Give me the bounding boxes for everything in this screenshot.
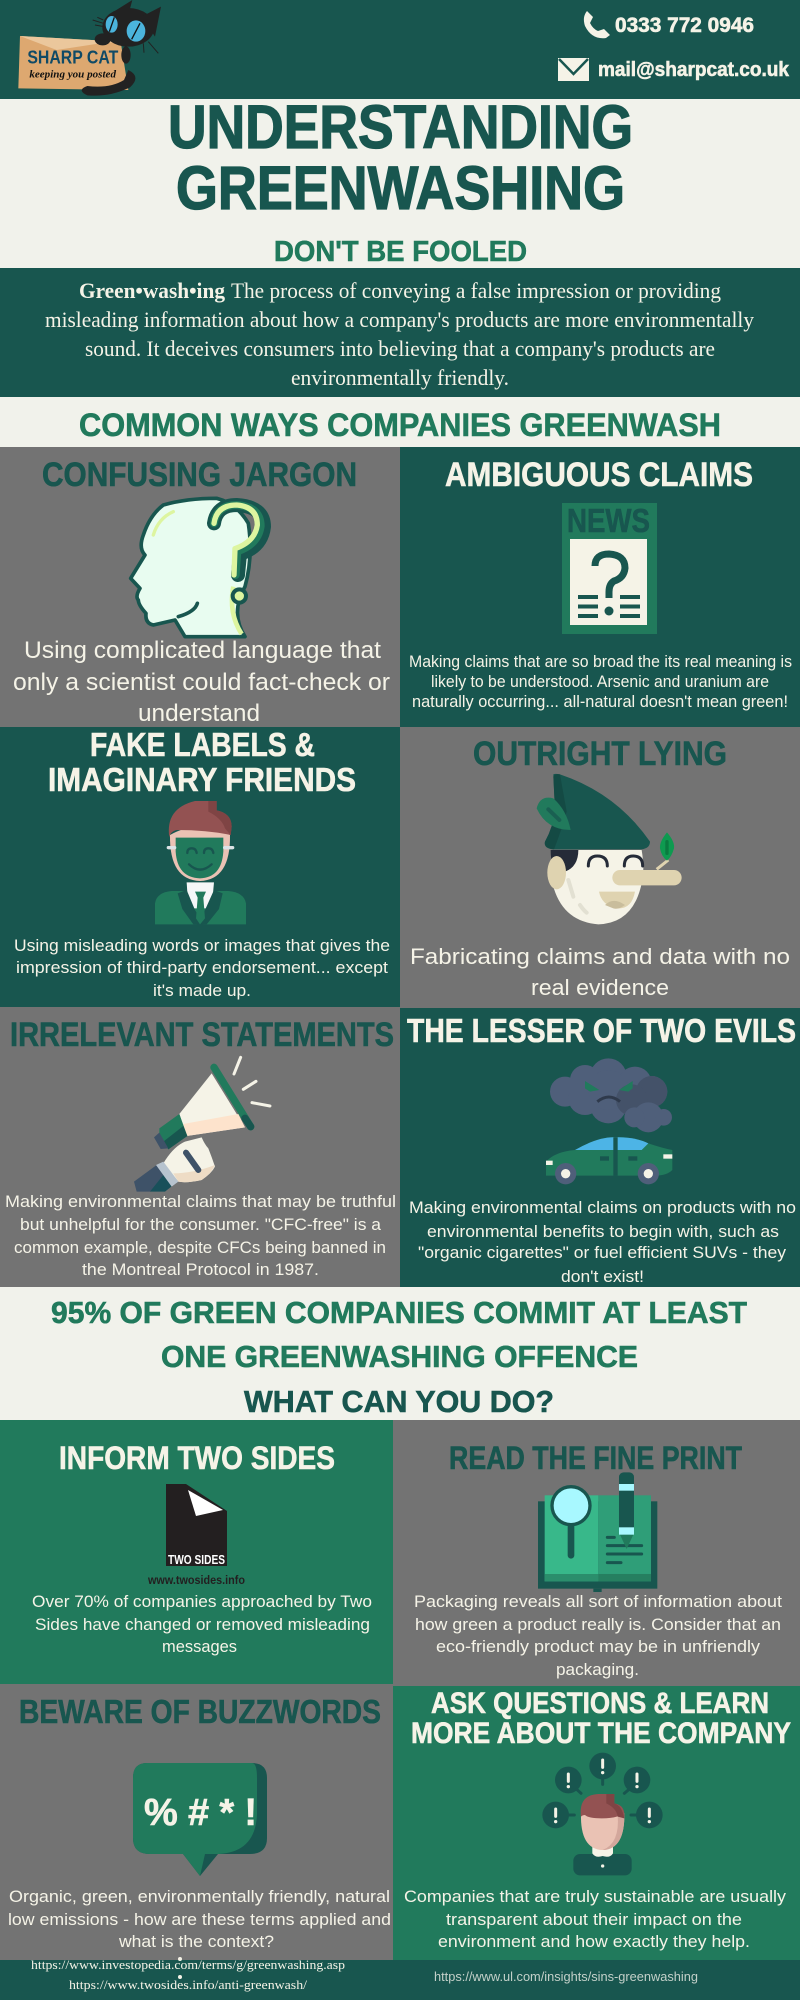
body text: the Montreal Protocol in 1987.	[82, 1260, 319, 1279]
body text	[409, 653, 792, 711]
body text: real evidence	[531, 975, 669, 1000]
panel: inform two sides	[0, 1420, 393, 1684]
subtitle: DON'T BE FOOLED	[274, 236, 527, 268]
icon: person with mask	[155, 801, 246, 924]
body text: what is the context?	[118, 1932, 274, 1951]
panel: lesser of two evils	[400, 1008, 800, 1287]
icon: person with question bubbles	[542, 1753, 663, 1875]
icon: Two Sides logo: TWO SIDES	[168, 1552, 225, 1567]
heading: FAKE LABELS &	[90, 726, 315, 763]
footer sources	[0, 1957, 800, 2000]
body text: eco-friendly product may be in unfriendly	[436, 1637, 761, 1656]
icon: Two Sides logo	[147, 1484, 245, 1587]
icon: Two Sides logo: www.twosides.info	[147, 1573, 245, 1587]
panel: ask questions	[393, 1686, 800, 1960]
title	[168, 93, 633, 222]
body text: understand	[138, 700, 260, 727]
body text: environmental benefits to begin with, such as	[427, 1222, 779, 1241]
body text: Making claims that are so broad the its real meaning is	[409, 653, 792, 671]
panel: outright lying	[400, 727, 800, 1008]
source link: investopedia: https://www.investopedia.com/terms/g/greenwashing.asp	[31, 1957, 345, 1972]
body text	[5, 1192, 396, 1279]
body text	[13, 637, 390, 727]
icon: head with question mark	[131, 498, 264, 637]
icon: pinocchio	[537, 774, 682, 924]
body text: how green a product really is. Consider that an	[415, 1615, 781, 1634]
body text	[404, 1887, 787, 1951]
body text: Packaging reveals all sort of information about	[414, 1592, 782, 1611]
icon: Sharp Cat logo: keeping you posted	[29, 69, 117, 80]
heading	[48, 726, 356, 798]
panel: beware of buzzwords	[0, 1684, 393, 1960]
panel: read the fine print	[393, 1420, 800, 1686]
definition panel: The process of conveying a false impression or providing	[231, 278, 721, 303]
heading: BEWARE OF BUZZWORDS	[19, 1693, 381, 1730]
definition panel: Green•wash•ing	[79, 278, 225, 303]
heading: OUTRIGHT LYING	[473, 735, 727, 773]
body text: only a scientist could fact-check or	[13, 669, 390, 696]
what can you do heading: WHAT CAN YOU DO?	[244, 1384, 554, 1419]
panel: irrelevant statements	[0, 1007, 400, 1287]
icon: newspaper: NEWS	[567, 502, 650, 539]
body text: don't exist!	[561, 1267, 644, 1286]
heading: CONFUSING JARGON	[42, 456, 357, 494]
heading	[411, 1687, 791, 1750]
icon: newspaper	[562, 502, 657, 634]
icon: speech bubble	[133, 1763, 267, 1876]
title: UNDERSTANDING	[168, 93, 633, 161]
source link: two sides: https://www.twosides.info/anti-greenwash/	[69, 1977, 307, 1992]
definition panel: sound. It deceives consumers into believing that a company's products are	[85, 336, 715, 361]
panel: ambiguous claims	[400, 447, 800, 727]
icon: Sharp Cat logo: SHARP CAT	[27, 46, 119, 67]
body text: common example, despite CFCs being banned in	[14, 1238, 386, 1257]
statistic heading	[51, 1295, 747, 1374]
body text: but unhelpful for the consumer. "CFC-free" is a	[20, 1215, 382, 1234]
body text: transparent about their impact on the	[446, 1910, 742, 1929]
source link: ul: https://www.ul.com/insights/sins-greenwashing	[434, 1969, 698, 1984]
body text	[14, 937, 390, 1000]
panel: confusing jargon	[0, 447, 400, 727]
statistic heading: ONE GREENWASHING OFFENCE	[161, 1339, 638, 1374]
definition panel: environmentally friendly.	[291, 365, 509, 390]
body text: Companies that are truly sustainable are usually	[404, 1887, 787, 1906]
icon: phone	[584, 11, 610, 38]
section heading: COMMON WAYS COMPANIES GREENWASH	[79, 407, 721, 443]
body text: Using complicated language that	[24, 637, 381, 664]
title: GREENWASHING	[176, 154, 625, 222]
body text: naturally occurring... all-natural doesn't mean green!	[412, 693, 788, 711]
body text: messages	[162, 1637, 237, 1656]
heading: IMAGINARY FRIENDS	[48, 761, 356, 798]
definition panel: misleading information about how a company's products are more environmentally	[45, 307, 754, 332]
header band	[0, 0, 800, 99]
body text: Organic, green, environmentally friendly, natural	[9, 1887, 390, 1906]
body text: Making environmental claims on products with no	[409, 1198, 796, 1217]
definition panel	[0, 268, 800, 397]
heading: IRRELEVANT STATEMENTS	[10, 1016, 394, 1054]
panel: fake labels	[0, 726, 400, 1007]
email address: mail@sharpcat.co.uk	[598, 59, 790, 81]
body text: likely to be understood. Arsenic and uranium are	[431, 673, 769, 691]
body text: impression of third-party endorsement... except	[16, 959, 388, 977]
phone number: 0333 772 0946	[615, 14, 754, 37]
body text: Making environmental claims that may be truthful	[5, 1192, 396, 1211]
icon: Sharp Cat logo	[18, 0, 161, 96]
heading: AMBIGUOUS CLAIMS	[445, 456, 753, 494]
heading: READ THE FINE PRINT	[449, 1440, 742, 1476]
body text: low emissions - how are these terms applied and	[8, 1910, 391, 1929]
icon: speech bubble: %#*!	[144, 1792, 257, 1834]
icon: megaphone	[134, 1057, 270, 1192]
body text: packaging.	[556, 1660, 639, 1679]
icon: book, magnifier and pen	[538, 1472, 657, 1592]
icon: angry cloud and car	[546, 1058, 672, 1184]
statistic heading: 95% OF GREEN COMPANIES COMMIT AT LEAST	[51, 1295, 747, 1330]
body text	[410, 944, 790, 1000]
body text	[409, 1198, 796, 1286]
body text: Using misleading words or images that gives the	[14, 937, 390, 955]
body text	[414, 1592, 782, 1679]
body text: "organic cigarettes" or fuel efficient SUVs - they	[418, 1243, 787, 1262]
body text: environment and how exactly they help.	[438, 1932, 750, 1951]
body text	[32, 1592, 372, 1656]
body text: Over 70% of companies approached by Two	[32, 1592, 372, 1611]
heading: INFORM TWO SIDES	[59, 1440, 335, 1476]
body text	[8, 1887, 391, 1951]
body text: it's made up.	[153, 982, 251, 1000]
icon: envelope	[558, 58, 589, 81]
body text: Fabricating claims and data with no	[410, 944, 790, 969]
body text: Sides have changed or removed misleading	[35, 1615, 370, 1634]
